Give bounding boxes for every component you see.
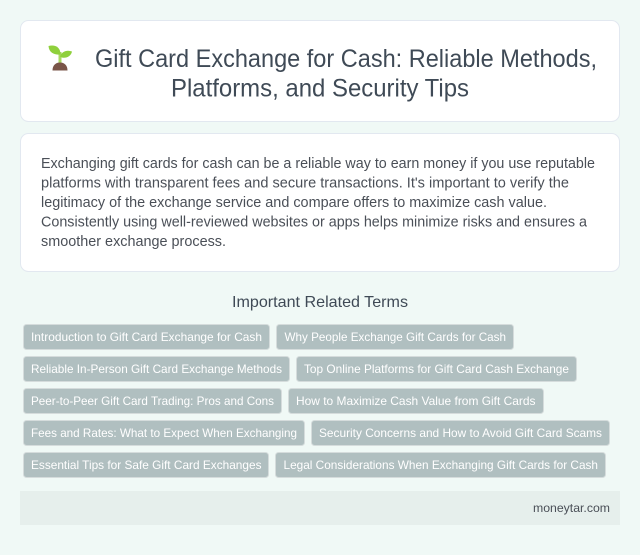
icon: seedling [48, 46, 72, 70]
tag: Peer-to-Peer Gift Card Trading: Pros and Cons [31, 394, 274, 408]
text block: introduction: Consistently using well-reviewed websites or apps helps minimize risks and ensures a [41, 214, 588, 230]
tag: Security Concerns and How to Avoid Gift Card Scams [319, 426, 602, 440]
tag: Fees and Rates: What to Expect When Exchanging [31, 426, 297, 440]
tag: How to Maximize Cash Value from Gift Cards [296, 394, 536, 408]
text block: introduction [41, 155, 595, 250]
text block: introduction: legitimacy of the exchange service and compare offers to maximize cash value. [41, 194, 547, 211]
tag: Essential Tips for Safe Gift Card Exchanges [31, 458, 262, 472]
tag [24, 420, 304, 446]
title: Platforms, and Security Tips [171, 76, 469, 102]
panel: introduction text [20, 134, 620, 272]
text block: introduction: platforms with transparent fees and secure transactions. It's important to verify the [41, 174, 569, 192]
tag: Reliable In-Person Gift Card Exchange Methods [31, 362, 282, 376]
tag: Introduction to Gift Card Exchange for Cash [31, 330, 262, 344]
tag [276, 324, 514, 350]
tag [24, 452, 268, 478]
tag [312, 420, 610, 446]
tag: Legal Considerations When Exchanging Gift Cards for Cash [284, 458, 598, 472]
tag list [24, 324, 610, 478]
tag [288, 388, 544, 414]
title [95, 46, 597, 102]
text block: introduction: smoother exchange process. [41, 233, 226, 250]
text block: introduction: Exchanging gift cards for cash can be a reliable way to earn money if you use reputable [41, 155, 595, 172]
tag [24, 388, 282, 414]
title: Gift Card Exchange for Cash: Reliable Methods, [95, 46, 597, 73]
footer source text: moneytar.com [533, 501, 610, 515]
tag [24, 356, 290, 382]
tag: Why People Exchange Gift Cards for Cash [284, 330, 506, 344]
tag [296, 356, 576, 382]
panel: title card [20, 20, 620, 122]
tag [24, 324, 270, 350]
tag: Top Online Platforms for Gift Card Cash Exchange [304, 362, 569, 376]
tag [276, 452, 606, 478]
heading: important related terms: Important Related Terms [232, 294, 408, 311]
footer [20, 491, 620, 525]
